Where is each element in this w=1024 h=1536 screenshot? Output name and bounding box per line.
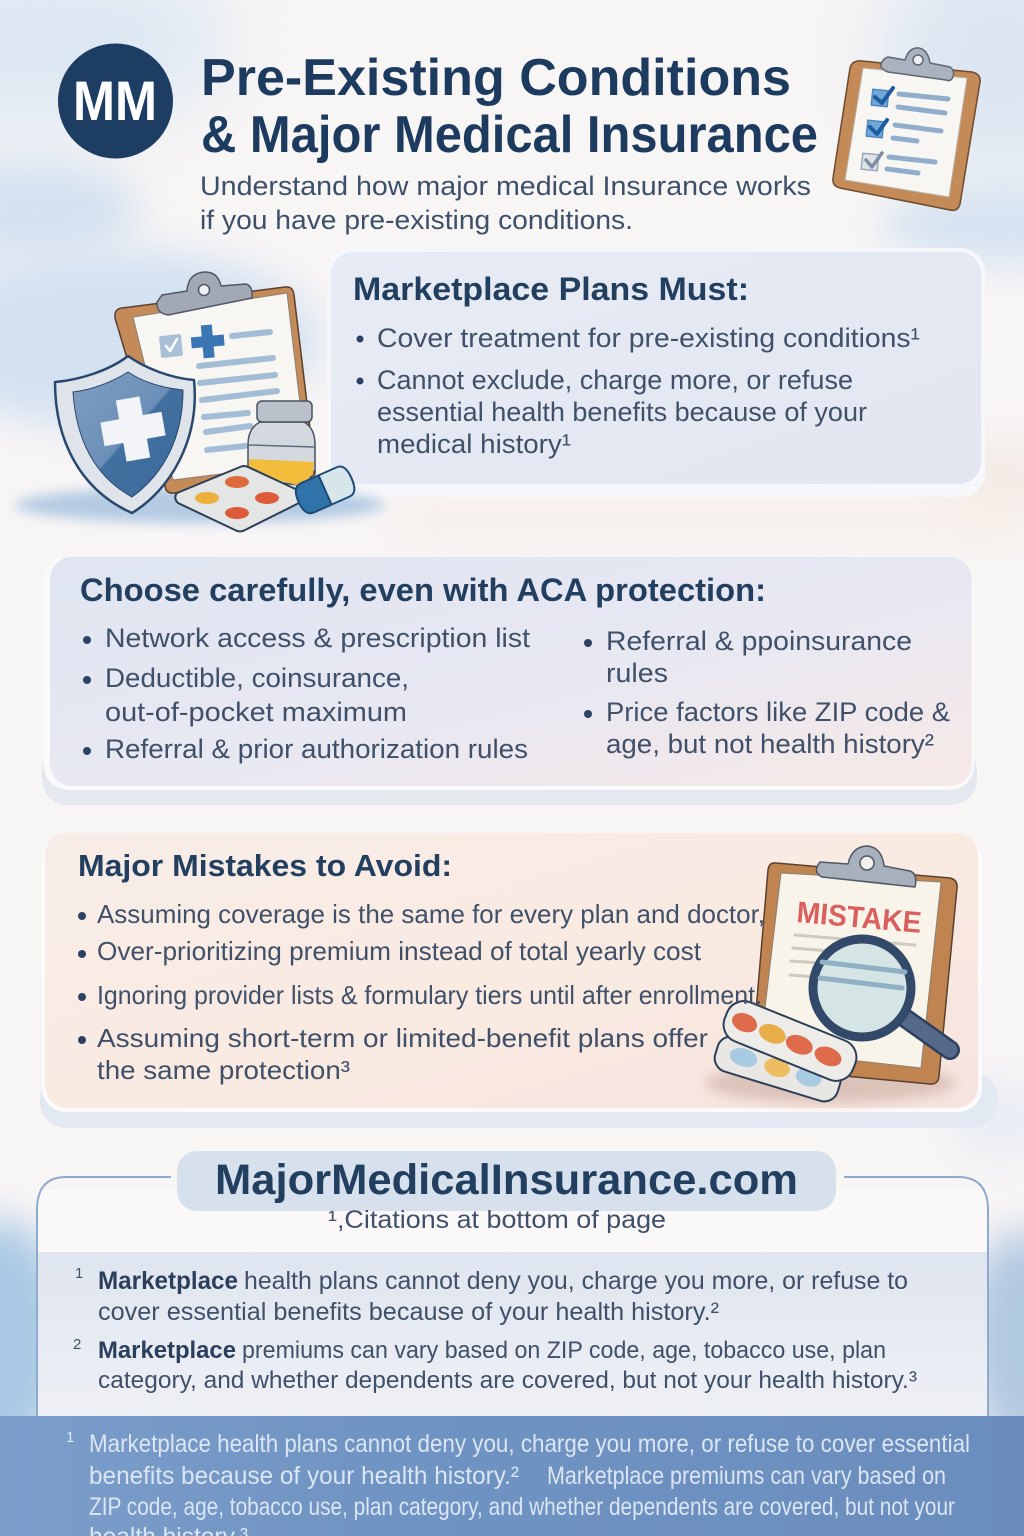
footnote 2: premiums can vary based on ZIP code, age, tobacco use, plan	[242, 1337, 886, 1364]
bullet list: marketplace rules: medical history¹	[377, 429, 571, 459]
footnote 2: Marketplace	[98, 1337, 236, 1364]
footer frame	[37, 1177, 988, 1416]
mistake label: MISTAKE	[795, 896, 923, 940]
panel: major mistakes	[40, 833, 998, 1128]
subtitle: if you have pre-existing conditions.	[200, 205, 633, 235]
upper blister strip	[718, 996, 862, 1086]
bullet list: right column: Referral & ppoinsurance	[606, 626, 912, 656]
bullet list: mistakes: Ignoring provider lists & formulary tiers until after enrollment.	[97, 980, 762, 1010]
bullet list: marketplace rules	[356, 323, 920, 459]
heading: major mistakes: Major Mistakes to Avoid:	[78, 848, 452, 883]
bullet list: marketplace rules: essential health benefits because of your	[377, 397, 867, 427]
header logo: MM circle: MM	[73, 69, 157, 132]
subtitle: Understand how major medical Insurance works	[200, 171, 811, 201]
bullet list: marketplace rules: Cannot exclude, charge more, or refuse	[377, 365, 853, 395]
capsule	[292, 464, 358, 516]
panel: choose carefully	[42, 557, 977, 805]
bullet list: left column: Referral & prior authorization rules	[105, 734, 528, 764]
medical clipboard	[115, 272, 315, 493]
title	[201, 49, 818, 164]
title: Pre-Existing Conditions	[201, 49, 791, 107]
website pill	[177, 1151, 836, 1211]
bottom band	[0, 1416, 1024, 1536]
footnote 1: 1	[75, 1265, 83, 1282]
footnote 2: 2	[73, 1336, 81, 1353]
band footnote text: benefits because of your health history.²	[89, 1462, 519, 1490]
band footnote text: 1	[66, 1429, 74, 1446]
footnote 2: category, and whether dependents are covered, but not your health history.³	[98, 1367, 917, 1394]
illustration: mistake clipboard, magnifier, pills	[705, 846, 957, 1105]
bullet list: left column: Network access & prescription list	[105, 623, 531, 653]
header logo: MM circle	[58, 44, 173, 158]
subtitle	[200, 171, 811, 235]
bullet list: mistakes: Over-prioritizing premium instead of total yearly cost	[97, 936, 702, 966]
bullet list: right column: age, but not health history²	[606, 729, 934, 759]
bullet list: left column	[83, 623, 531, 764]
bullet list: mistakes: Assuming coverage is the same for every plan and doctor,	[97, 899, 765, 929]
panel: footnotes	[38, 1252, 987, 1416]
illustration: shield, clipboard, medication	[15, 272, 385, 532]
footnote 2	[73, 1336, 917, 1394]
panel: marketplace plans must	[327, 248, 985, 497]
mistake clipboard	[752, 846, 957, 1084]
magnifying glass	[813, 939, 950, 1050]
icon: header clipboard checklist	[833, 48, 980, 210]
website pill: MajorMedicalInsurance.com	[215, 1156, 798, 1204]
bullet list: mistakes: Assuming short-term or limited-benefit plans offer	[97, 1023, 708, 1053]
footnote 1	[75, 1265, 908, 1326]
bullet list: mistakes: the same protection³	[97, 1055, 350, 1085]
footnote 1: health plans cannot deny you, charge you more, or refuse to	[244, 1267, 908, 1295]
footnote 1: cover essential benefits because of your health history.²	[98, 1298, 719, 1326]
band footnote text: Marketplace premiums can vary based on	[547, 1462, 946, 1490]
title: & Major Medical Insurance	[201, 106, 818, 164]
bullet list: marketplace rules: Cover treatment for pre-existing conditions¹	[377, 323, 920, 353]
bullet list: left column: out-of-pocket maximum	[105, 697, 407, 727]
bullet list: right column	[584, 626, 950, 759]
band footnote text	[66, 1429, 970, 1536]
footnote 1: Marketplace	[98, 1267, 238, 1295]
heading: choose carefully: Choose carefully, even with ACA protection:	[80, 572, 766, 608]
bullet list: right column: rules	[606, 658, 668, 688]
bullet list: left column: Deductible, coinsurance,	[105, 663, 409, 693]
pill bottle	[248, 401, 315, 486]
shield	[55, 356, 195, 513]
citation note: ¹,Citations at bottom of page	[328, 1206, 666, 1234]
bullet list: mistakes	[78, 899, 765, 1085]
bullet list: right column: Price factors like ZIP code &	[606, 697, 950, 727]
heading: marketplace plans must: Marketplace Plans Must:	[353, 271, 749, 307]
blister pack	[175, 466, 306, 532]
lower blister strip	[711, 1033, 844, 1105]
